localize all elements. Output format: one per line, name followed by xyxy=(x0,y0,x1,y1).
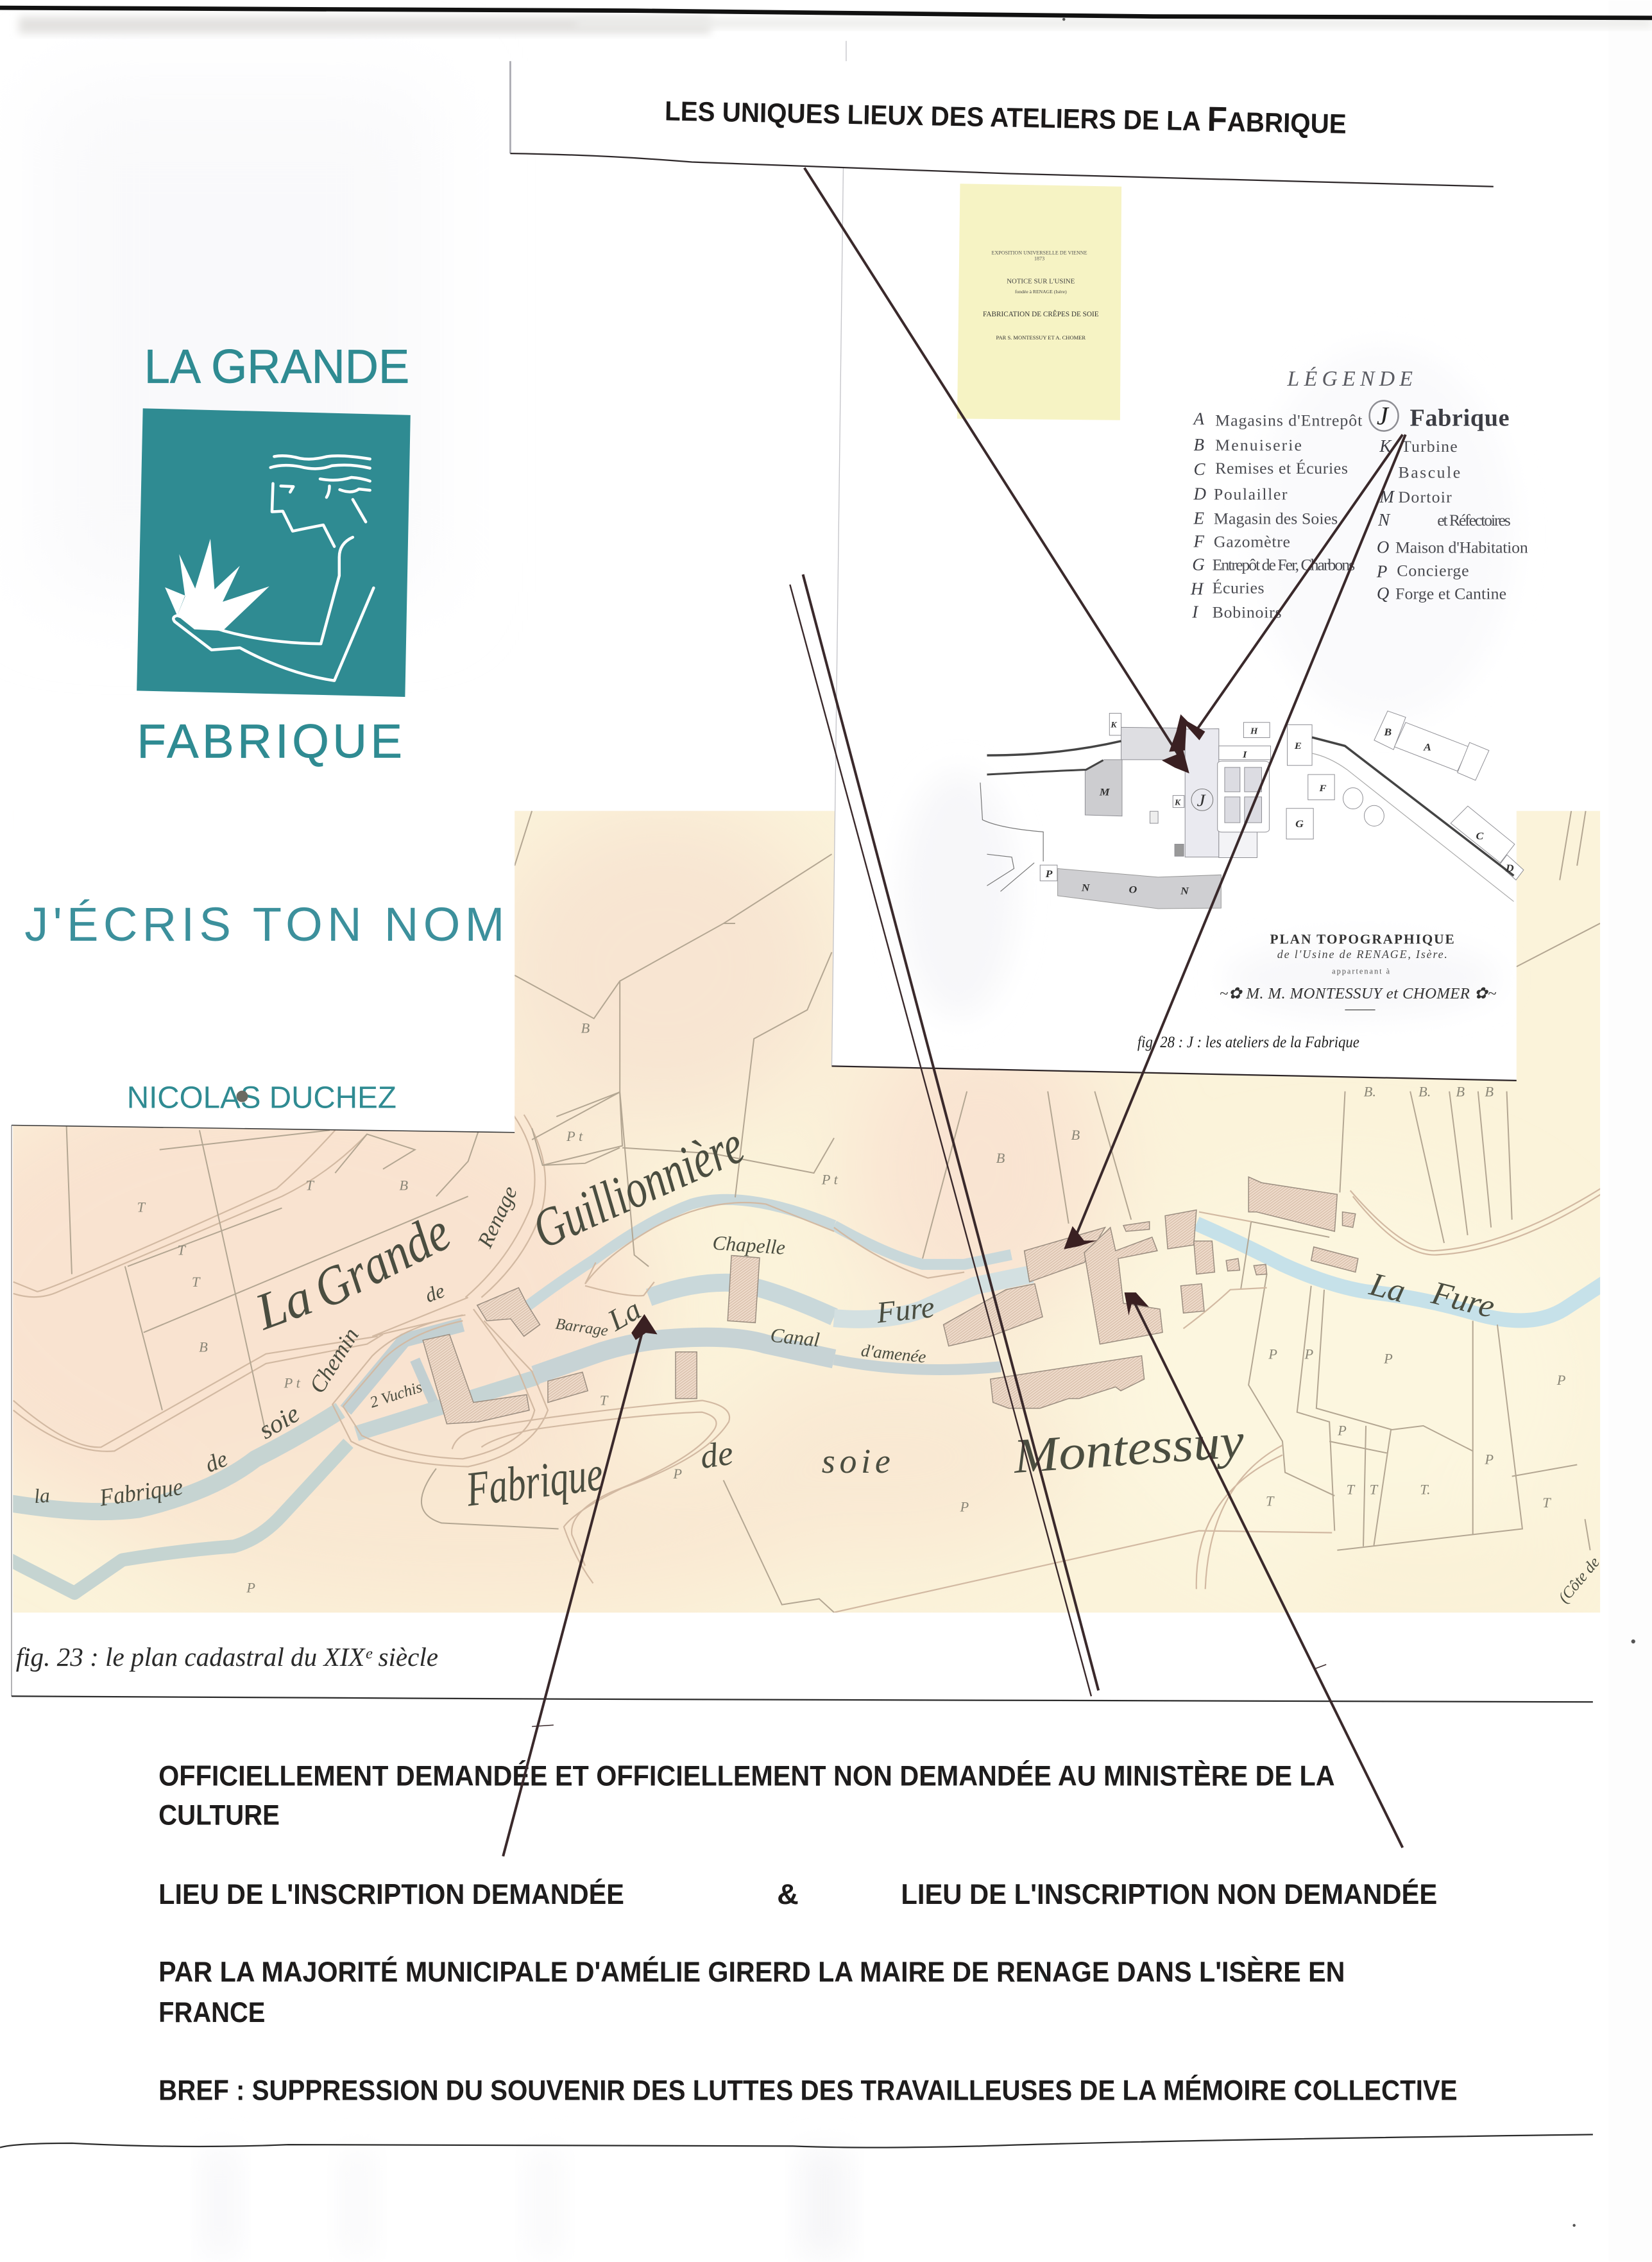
plan letters: C xyxy=(1476,830,1484,842)
plan letters: F xyxy=(1318,784,1327,794)
map place names: P xyxy=(1337,1423,1347,1439)
plan letters: A xyxy=(1423,741,1431,753)
map place names: Fure xyxy=(1427,1274,1498,1325)
legend: Fabrique xyxy=(1410,405,1510,432)
legend: J xyxy=(1377,401,1390,430)
body text: CULTURE xyxy=(158,1798,280,1831)
map place names: B xyxy=(1071,1127,1080,1143)
map place names: T. xyxy=(1420,1482,1431,1498)
map place names: P xyxy=(1268,1346,1277,1362)
map place names: P t xyxy=(284,1375,301,1391)
map place names: T xyxy=(177,1242,186,1258)
legend: G xyxy=(1192,554,1205,574)
map place names: T xyxy=(1347,1482,1356,1498)
map place names: La xyxy=(1365,1265,1409,1310)
legend: Magasins d'Entrepôt xyxy=(1215,411,1363,430)
map place names: Grande xyxy=(304,1201,460,1321)
map place names: 2 Vuchis xyxy=(368,1378,424,1412)
plan letters: D xyxy=(1505,862,1514,874)
legend: D xyxy=(1193,484,1206,503)
plan letters: B xyxy=(1383,726,1392,738)
map place names: Renage xyxy=(473,1183,522,1252)
legend: Remises et Écuries xyxy=(1215,459,1348,477)
map place names: T xyxy=(1370,1482,1379,1498)
map place names: Canal xyxy=(769,1324,821,1351)
rivers right section xyxy=(834,1224,1606,1369)
body text: OFFICIELLEMENT DEMANDÉE ET OFFICIELLEMENT NON DEMANDÉE AU MINISTÈRE DE LA xyxy=(158,1760,1335,1792)
map place names: P xyxy=(1304,1346,1313,1362)
map place names: P xyxy=(1383,1350,1393,1366)
legend: Bobinoirs xyxy=(1213,603,1282,622)
title text: LES UNIQUES LIEUX DES ATELIERS DE LA FABRIQUE xyxy=(665,89,1347,141)
map place names: soie xyxy=(822,1442,895,1480)
plan letters: I xyxy=(1242,750,1247,760)
map place names: B xyxy=(581,1020,590,1036)
plan letters: J xyxy=(1196,791,1206,810)
legend: et Réfectoires xyxy=(1437,511,1511,529)
logo wordmark top: LA GRANDE xyxy=(144,339,409,393)
legend xyxy=(1190,367,1528,622)
legend: K xyxy=(1379,436,1392,456)
plan letters: O xyxy=(1128,884,1137,895)
plan title block xyxy=(1220,931,1496,1010)
hatched buildings right xyxy=(944,1177,1358,1409)
map place names: B. xyxy=(1418,1084,1431,1100)
map place names: P xyxy=(1484,1452,1494,1468)
workers' housing band xyxy=(1058,868,1221,909)
map place names: la xyxy=(33,1484,51,1507)
booklet cover: EXPOSITION UNIVERSELLE DE VIENNE xyxy=(992,250,1087,255)
map place names: La xyxy=(248,1269,319,1341)
legend: F xyxy=(1193,531,1204,551)
map place names: B xyxy=(996,1150,1005,1166)
plan letters: K xyxy=(1174,798,1182,807)
legend: C xyxy=(1193,459,1205,479)
map place names: P t xyxy=(821,1172,839,1188)
legend: Concierge xyxy=(1397,561,1469,579)
legend: P xyxy=(1376,562,1387,581)
author name: NICOLAS DUCHEZ xyxy=(127,1081,396,1115)
plan letters: M xyxy=(1099,786,1111,798)
booklet cover: PAR S. MONTESSUY ET A. CHOMER xyxy=(996,334,1086,341)
arrowheads xyxy=(631,714,1205,1340)
plan letters: K xyxy=(1110,720,1118,729)
factory buildings xyxy=(1040,711,1524,881)
logo: La Grande Fabrique xyxy=(137,339,411,768)
body text: & xyxy=(777,1878,799,1910)
plan letters: N xyxy=(1180,885,1189,896)
map place names: de xyxy=(422,1279,448,1307)
legend: Magasin des Soies xyxy=(1214,510,1338,528)
legend: A xyxy=(1192,409,1204,428)
legend: Menuiserie xyxy=(1215,436,1302,454)
plan letters: G xyxy=(1295,818,1304,830)
map place names: Fure xyxy=(874,1290,936,1330)
map place names: La xyxy=(602,1292,647,1338)
legend: B xyxy=(1193,435,1204,454)
legend: Forge et Cantine xyxy=(1395,584,1506,603)
map place names: Fabrique xyxy=(463,1446,606,1517)
caption fig 28: fig. 28 : J : les ateliers de la Fabrique xyxy=(1137,1032,1359,1051)
map place names: de xyxy=(698,1434,735,1476)
map place names: P xyxy=(672,1466,682,1482)
map place names: P xyxy=(1556,1372,1566,1388)
map place names: B xyxy=(1485,1084,1494,1100)
plan letters xyxy=(1045,720,1514,896)
plan title block: appartenant à xyxy=(1332,967,1390,976)
legend: H xyxy=(1190,579,1204,599)
map place names: T xyxy=(600,1392,609,1408)
legend: Entrepôt de Fer, Charbons xyxy=(1213,555,1355,574)
caption fig 23: fig. 23 : le plan cadastral du XIXᵉ siècle xyxy=(16,1642,438,1672)
map place names: B. xyxy=(1364,1084,1376,1100)
legend: I xyxy=(1191,603,1199,622)
legend: Q xyxy=(1377,583,1389,603)
legend: LÉGENDE xyxy=(1287,367,1413,391)
plan title block: ~✿ M. M. MONTESSUY et CHOMER ✿~ xyxy=(1220,985,1496,1002)
plan letters: H xyxy=(1250,726,1259,736)
cadastral map xyxy=(0,808,1606,1615)
colour wash of the map xyxy=(13,821,1101,1585)
heading: J'écris ton nom: J'ÉCRIS TON NOM xyxy=(24,898,504,951)
legend: Gazomètre xyxy=(1214,532,1290,551)
logo mark xyxy=(137,408,411,697)
body text: FRANCE xyxy=(158,1996,265,2028)
map place names: Fabrique xyxy=(98,1473,185,1512)
parcel lines upper area xyxy=(515,811,1600,1267)
body text: BREF : SUPPRESSION DU SOUVENIR DES LUTTES DES TRAVAILLEUSES DE LA MÉMOIRE COLLECTIVE xyxy=(158,2073,1458,2106)
logo wordmark bottom: FABRIQUE xyxy=(137,715,402,768)
legend: N xyxy=(1377,510,1391,529)
map place names: Barrage xyxy=(554,1315,609,1340)
parcel lines right xyxy=(923,1092,1590,1550)
map place names: Montessuy xyxy=(1011,1413,1246,1484)
plan title block: PLAN TOPOGRAPHIQUE xyxy=(1270,931,1456,947)
legend: Turbine xyxy=(1401,437,1458,456)
legend: Dortoir xyxy=(1399,488,1452,506)
body text: PAR LA MAJORITÉ MUNICIPALE D'AMÉLIE GIRERD LA MAIRE DE RENAGE DANS L'ISÈRE EN xyxy=(158,1955,1345,1988)
map place names: P xyxy=(246,1580,255,1596)
topographic plan of the factory xyxy=(980,711,1524,909)
legend: M xyxy=(1379,487,1395,506)
parcel lines left xyxy=(67,1092,834,1613)
map place names: T xyxy=(1266,1493,1275,1509)
plan letters: P xyxy=(1045,868,1053,880)
map place names: soie xyxy=(253,1399,304,1444)
legend: Maison d'Habitation xyxy=(1395,538,1528,556)
booklet cover: fondée à RENAGE (Isère) xyxy=(1015,289,1067,295)
plan letters: E xyxy=(1294,741,1302,751)
map place names: Chapelle xyxy=(712,1231,786,1259)
booklet cover: FABRICATION DE CRÊPES DE SOIE xyxy=(983,311,1099,318)
map place names: T xyxy=(192,1274,201,1290)
title strip xyxy=(510,61,1494,187)
map place names: B xyxy=(199,1339,208,1355)
hand-drawn arrows xyxy=(503,168,1406,1856)
map place names: Guillionnière xyxy=(524,1115,753,1260)
map place names: T xyxy=(137,1199,146,1215)
map place names xyxy=(33,1020,1603,1606)
map place names: B xyxy=(1456,1084,1465,1100)
legend: O xyxy=(1377,537,1389,556)
booklet cover: NOTICE SUR L'USINE xyxy=(1007,277,1075,285)
legend: Bascule xyxy=(1399,463,1460,482)
panel edges xyxy=(0,1126,1593,2148)
map place names: (Côte de xyxy=(1555,1554,1603,1606)
body text xyxy=(158,1760,1458,2106)
map place names: P xyxy=(959,1499,969,1515)
map place names: B xyxy=(399,1178,408,1194)
body text: LIEU DE L'INSCRIPTION NON DEMANDÉE xyxy=(901,1878,1437,1910)
rivers left section xyxy=(0,1199,834,1593)
map place names: P t xyxy=(566,1128,583,1144)
hatched buildings left xyxy=(423,1255,760,1424)
booklet cover xyxy=(957,184,1121,420)
map place names: de xyxy=(201,1446,231,1477)
map place names: d'amenée xyxy=(860,1341,927,1367)
body text: LIEU DE L'INSCRIPTION DEMANDÉE xyxy=(158,1878,624,1910)
roads left section xyxy=(13,1115,834,1583)
plan letters: N xyxy=(1081,882,1090,893)
legend: Écuries xyxy=(1213,578,1265,597)
plan title block: de l'Usine de RENAGE, Isère. xyxy=(1277,948,1447,961)
booklet cover: 1873 xyxy=(1034,255,1044,261)
roads right xyxy=(834,1188,1601,1613)
left white panel xyxy=(12,801,515,1133)
map place names: T xyxy=(1542,1495,1551,1511)
river and road on the plan xyxy=(980,737,1513,902)
legend: Poulailler xyxy=(1214,484,1288,503)
map place names: T xyxy=(305,1178,314,1194)
legend: E xyxy=(1193,509,1204,528)
plan panel xyxy=(831,41,1607,1081)
map place names: Chemin xyxy=(304,1323,364,1398)
